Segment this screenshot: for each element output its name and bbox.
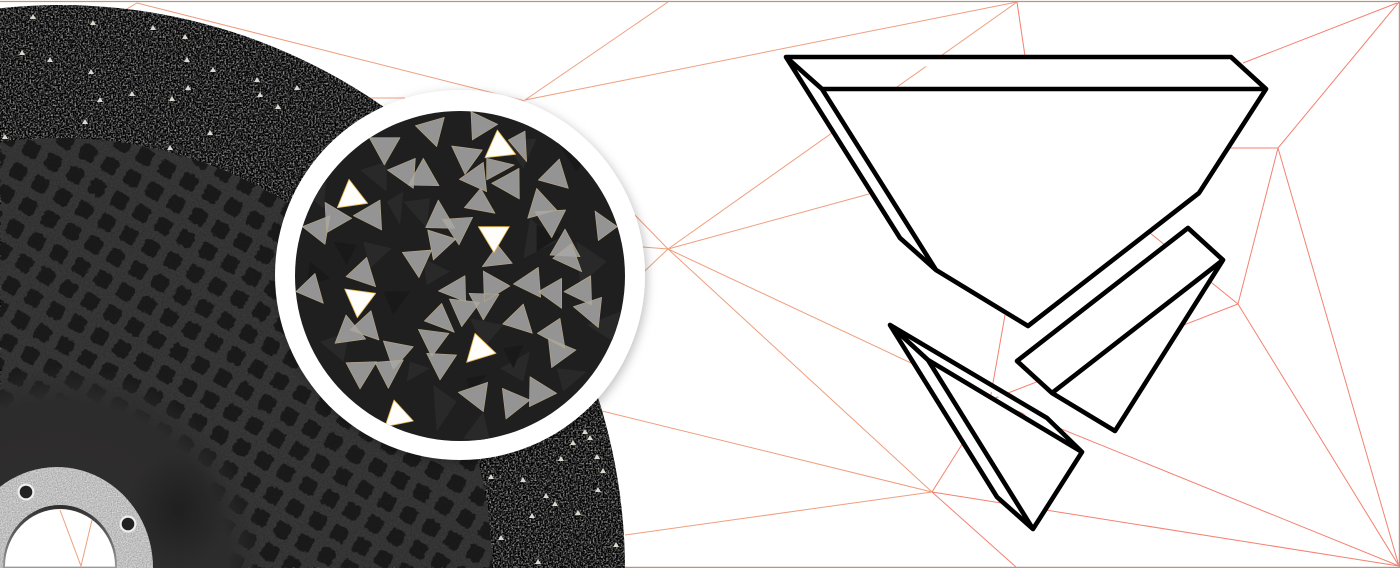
hub screw hole right (120, 516, 136, 532)
hub screw hole left (18, 484, 34, 500)
wheel waffle-textured face (0, 120, 520, 568)
large triangular grain outline (786, 57, 1266, 326)
magnified grain lens (275, 90, 645, 460)
orange triangulated line network: left part (120, 2, 1017, 535)
bright in-focus grains (337, 130, 516, 427)
lens dark interior (295, 111, 625, 441)
lines seen through hub hole (60, 510, 92, 566)
grinding wheel (0, 0, 640, 568)
salmon triangulated line network: right part (932, 2, 1399, 567)
lens white ring (275, 90, 645, 460)
small grain outline (890, 325, 1082, 529)
faint background grains (303, 138, 620, 442)
darker background grains (510, 142, 581, 368)
metal hub with mounting hole (0, 465, 156, 568)
gray out-of-focus grains (296, 112, 617, 419)
wheel outer abrasive grit rim (0, 0, 640, 568)
lens grains (296, 112, 620, 442)
wheel smooth inner zone (0, 365, 265, 568)
medium grain outline (1017, 228, 1223, 431)
grain diagram outlines (786, 57, 1266, 529)
